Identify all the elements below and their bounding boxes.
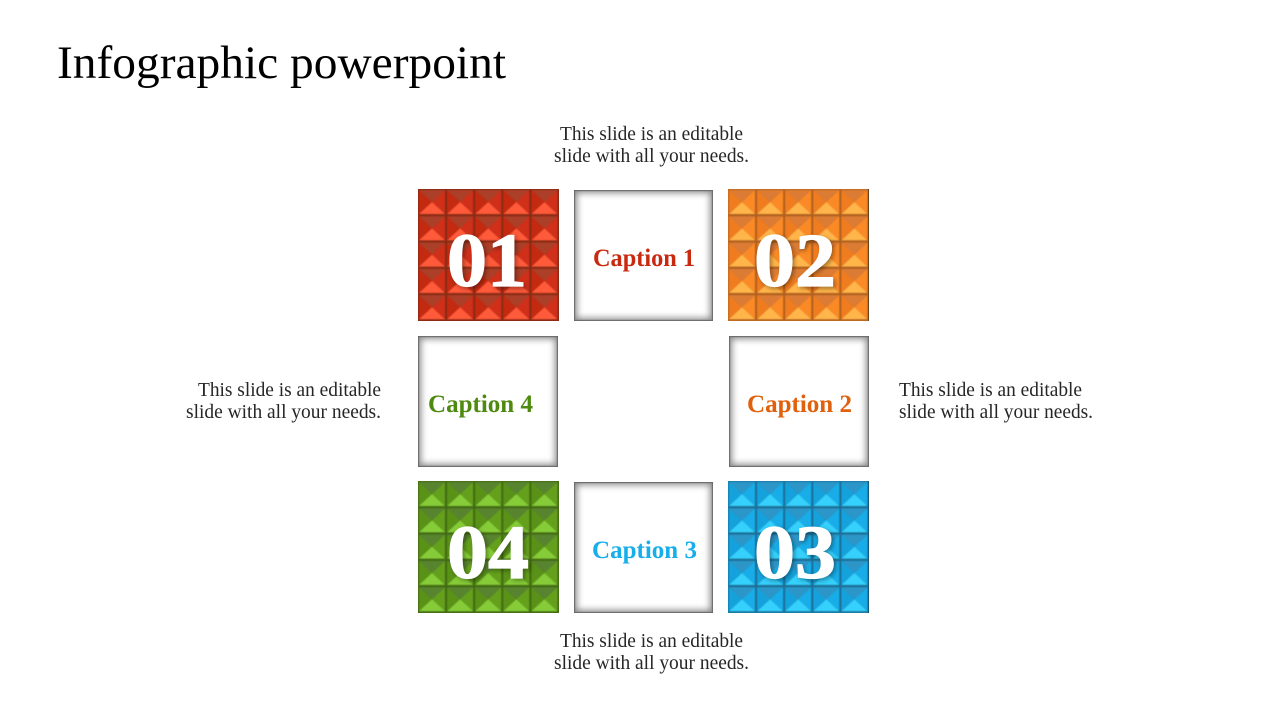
text block: bottom description: slide with all your needs. [554, 652, 749, 674]
text block: left description: This slide is an editable [198, 379, 381, 401]
text block: bottom description [554, 630, 749, 674]
panel: caption 4 [418, 336, 558, 467]
panel: caption 1 [574, 190, 713, 321]
text block: top description: This slide is an editable [560, 123, 743, 145]
panel: caption 2 [729, 336, 869, 467]
panel: caption 1: Caption 1 [593, 245, 695, 272]
text block: right description: slide with all your needs. [899, 401, 1093, 423]
panel: caption 2: Caption 2 [747, 391, 852, 418]
panel: caption 3 [574, 482, 713, 613]
tile: 03 blue: 03 [754, 511, 836, 595]
text block: right description [899, 379, 1093, 423]
panel: caption 3: Caption 3 [592, 537, 697, 564]
text block: left description: slide with all your needs. [186, 401, 381, 423]
tile: 01 red: 01 [447, 219, 527, 303]
text block: right description: This slide is an editable [899, 379, 1082, 401]
text block: top description [554, 123, 749, 167]
title: Infographic powerpoint [57, 37, 506, 89]
tile: 03 blue [728, 481, 869, 613]
text block: bottom description: This slide is an editable [560, 630, 743, 652]
text block: top description: slide with all your needs. [554, 145, 749, 167]
tile: 04 green [418, 481, 559, 613]
tile: 02 orange [728, 189, 869, 321]
tile: 01 red [418, 189, 559, 321]
panel: caption 4: Caption 4 [428, 391, 533, 418]
tile: 04 green: 04 [447, 511, 529, 595]
text block: left description [186, 379, 381, 423]
tile: 02 orange: 02 [754, 219, 836, 303]
